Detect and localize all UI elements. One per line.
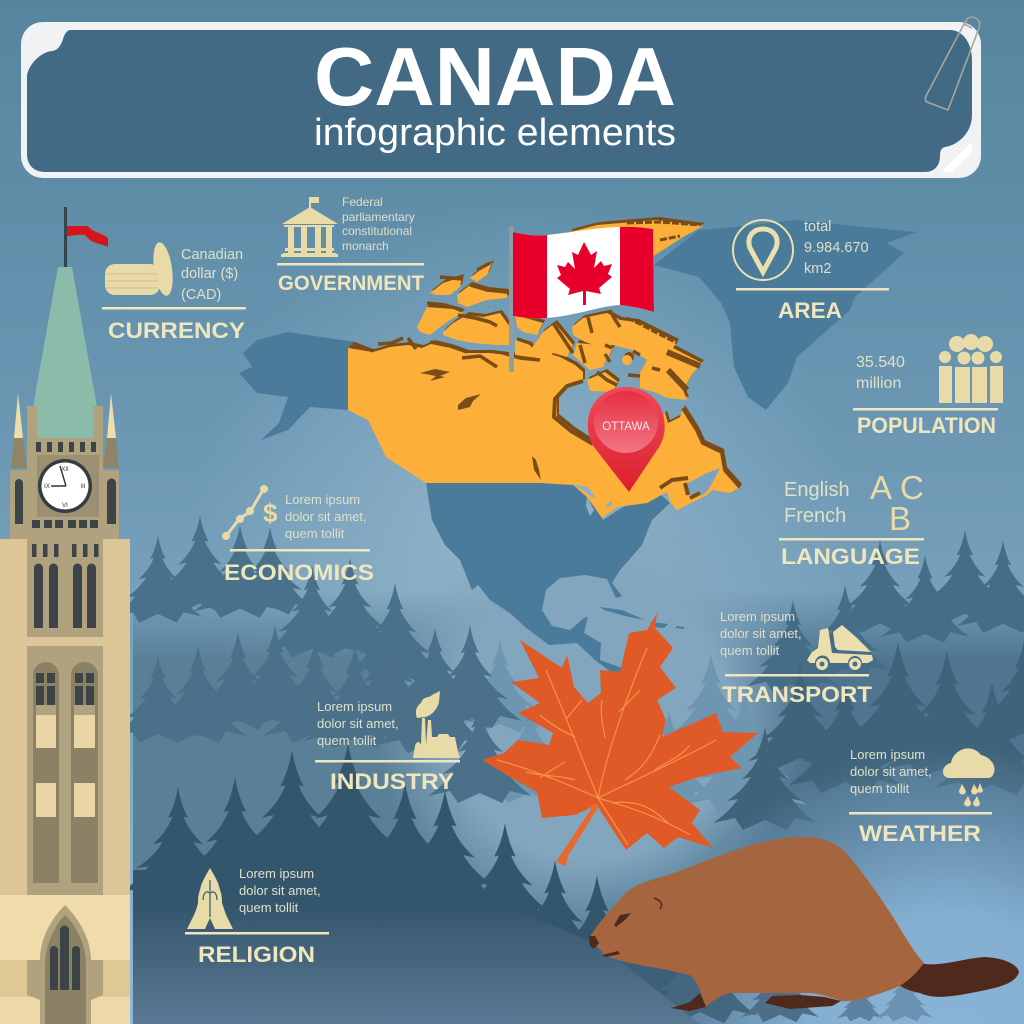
- forest front row: [121, 743, 934, 1024]
- forest row two left: [114, 625, 532, 803]
- Parliament tower: [0, 207, 130, 1024]
- economics block: [222, 485, 374, 585]
- USA and Mexico: [426, 483, 670, 678]
- beaver eye, nose, mouth: [589, 913, 631, 957]
- flag maple leaf: [557, 242, 612, 305]
- Greenland: [654, 220, 917, 410]
- government block: Federal: [342, 195, 383, 209]
- economics block: Lorem ipsum: [285, 492, 360, 507]
- government block: GOVERNMENT: [278, 272, 424, 295]
- beaver ear: [654, 898, 662, 909]
- spire: [33, 267, 97, 438]
- clock: VI: [62, 503, 68, 509]
- forest row one right: [746, 530, 1024, 693]
- language block: English: [784, 479, 850, 501]
- area block: AREA: [778, 298, 842, 323]
- icon: letters: C: [900, 469, 924, 506]
- population block: POPULATION: [857, 413, 996, 438]
- currency block: CURRENCY: [108, 318, 245, 343]
- subtitle text: infographic elements: [314, 112, 676, 154]
- title text: CANADA: [314, 30, 676, 123]
- religion block: [185, 866, 329, 967]
- beaver tail: [893, 957, 1019, 997]
- area block: [733, 219, 889, 323]
- title panel: [21, 17, 981, 178]
- lakes and coastal ridges: [420, 369, 541, 480]
- back forest: [453, 640, 807, 814]
- Ottawa pin: OTTAWA: [602, 421, 650, 433]
- area block: 9.984.670: [804, 240, 869, 256]
- flag of Canada: [509, 226, 654, 372]
- right fade into sky: [620, 640, 1024, 1024]
- icon: rising chart with dollar: [222, 485, 278, 540]
- forest row one: [114, 515, 479, 716]
- icon: letters: [870, 469, 924, 537]
- Alaska: [239, 332, 355, 440]
- Ottawa pin: [588, 387, 665, 492]
- economics block: ECONOMICS: [224, 560, 374, 585]
- government block: parliamentary: [342, 210, 415, 224]
- language block: LANGUAGE: [781, 544, 920, 569]
- religion block: quem tollit: [239, 900, 299, 915]
- population block: million: [856, 375, 901, 392]
- religion block: RELIGION: [198, 942, 315, 967]
- icon: people: [939, 334, 1003, 403]
- economics block: quem tollit: [285, 526, 345, 541]
- beaver: [589, 837, 1019, 1011]
- transport block: TRANSPORT: [722, 682, 873, 707]
- beaver body: [589, 837, 924, 1007]
- government block: constitutional: [342, 224, 412, 238]
- clock: [38, 459, 92, 513]
- clock: XII: [61, 467, 69, 473]
- area block: km2: [804, 261, 831, 277]
- icon: rain cloud: [943, 748, 995, 807]
- icon: location ring: [733, 220, 793, 280]
- weather block: dolor sit amet,: [850, 764, 932, 779]
- icon: rising chart with dollar: $: [263, 498, 278, 528]
- population block: [853, 334, 1003, 438]
- upper stone: [10, 406, 119, 637]
- government block: [277, 195, 424, 295]
- industry block: dolor sit amet,: [317, 716, 399, 731]
- map of North America: [239, 220, 917, 678]
- beaver feet: [671, 993, 841, 1011]
- language block: [779, 469, 924, 569]
- industry block: quem tollit: [317, 733, 377, 748]
- religion block: dolor sit amet,: [239, 883, 321, 898]
- Caribbean islands: [600, 607, 684, 629]
- small spires: [14, 393, 116, 438]
- weather block: quem tollit: [850, 781, 910, 796]
- lower bands: [0, 895, 130, 960]
- industry block: Lorem ipsum: [317, 699, 392, 714]
- transport block: quem tollit: [720, 643, 780, 658]
- clock: III: [80, 484, 86, 490]
- icon: coins: [105, 241, 176, 297]
- clock: IX: [44, 484, 50, 490]
- leaf veins: [497, 648, 716, 845]
- paperclip: [925, 17, 980, 110]
- area block: total: [804, 219, 831, 235]
- currency block: dollar ($): [181, 266, 238, 282]
- transport block: dolor sit amet,: [720, 626, 802, 641]
- leaf stem: [556, 803, 599, 866]
- icon: factory: [413, 691, 460, 758]
- window rows: [15, 442, 116, 528]
- weather block: Lorem ipsum: [850, 747, 925, 762]
- weather block: WEATHER: [859, 821, 981, 846]
- maple leaf: [482, 613, 758, 866]
- icon: letters: B: [889, 500, 911, 537]
- language block: French: [784, 505, 846, 527]
- currency block: (CAD): [181, 287, 221, 303]
- industry block: [315, 691, 460, 794]
- population block: 35.540: [856, 354, 905, 371]
- wings: [0, 539, 130, 1024]
- gate: [27, 905, 103, 1024]
- icon: praying hands: [187, 868, 233, 929]
- icon: dump truck: [807, 625, 873, 670]
- transport block: Lorem ipsum: [720, 609, 795, 624]
- tower flag: [66, 226, 108, 247]
- weather block: [849, 747, 995, 846]
- Gulf of St Lawrence: [685, 468, 720, 495]
- government block: monarch: [342, 239, 389, 253]
- flag pole: [509, 226, 514, 372]
- forest row two right: [713, 640, 1024, 830]
- religion block: Lorem ipsum: [239, 866, 314, 881]
- transport block: [720, 609, 873, 707]
- currency block: [102, 241, 246, 343]
- icon: letters: A: [870, 469, 892, 506]
- currency block: Canadian: [181, 247, 243, 263]
- Canada territory with brown shadow: [348, 217, 742, 518]
- economics block: dolor sit amet,: [285, 509, 367, 524]
- lower shaft: [27, 646, 103, 899]
- Great Lakes: [570, 484, 612, 516]
- icon: government building: [281, 197, 338, 257]
- industry block: INDUSTRY: [330, 769, 454, 794]
